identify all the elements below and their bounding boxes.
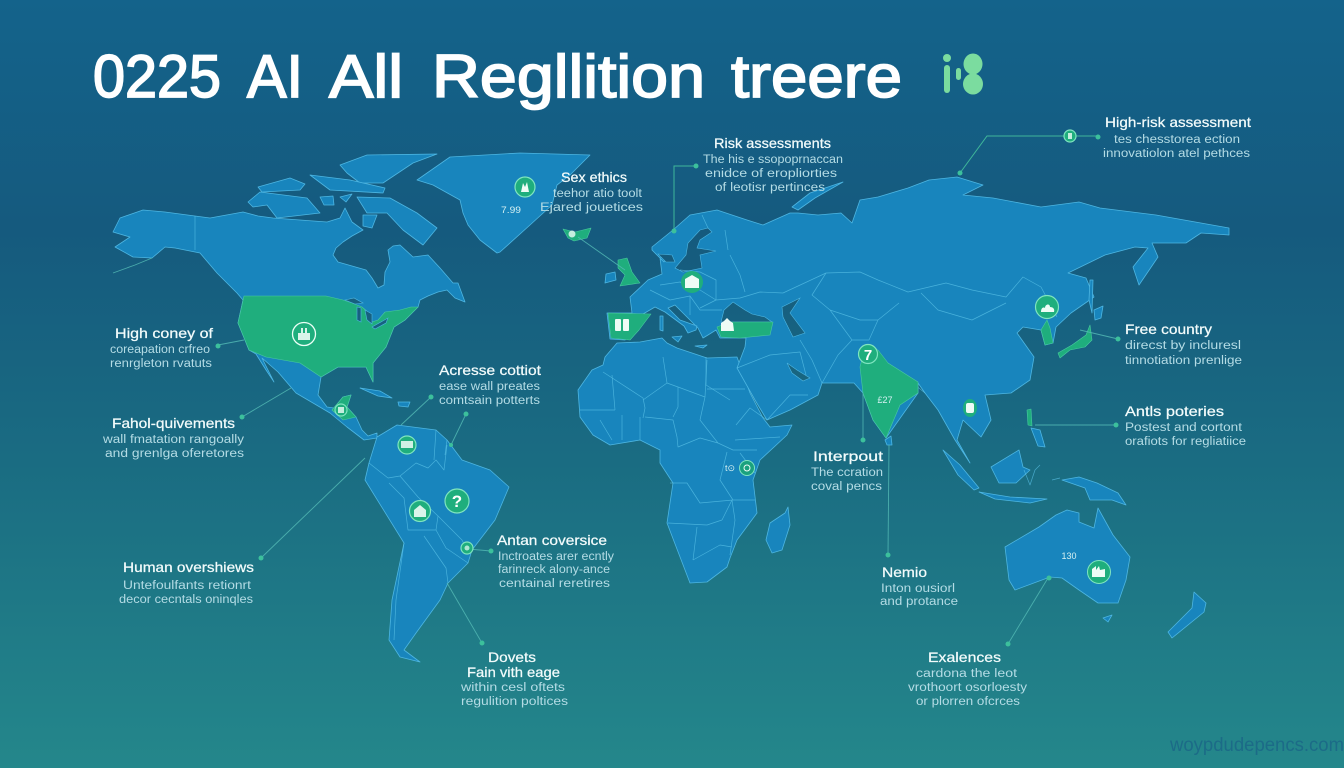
callout: acresse cottiot: comtsain potterts xyxy=(439,395,540,407)
label: Australia value: 130 xyxy=(1061,551,1077,561)
callout: exalences: or plorren ofcrces xyxy=(916,696,1020,708)
country highlight: India xyxy=(860,347,918,438)
country highlight: Central America xyxy=(332,395,356,420)
callout: antls poteries: Antls poteries xyxy=(1125,403,1224,419)
country highlight: Spain xyxy=(608,313,651,340)
callout: free country: tinnotiation prenlige xyxy=(1125,355,1242,367)
callout: human overshiews xyxy=(119,559,254,606)
continent: Greenland xyxy=(417,153,590,253)
title: AI xyxy=(247,43,303,110)
continent: Africa xyxy=(578,338,792,583)
connector: antls xyxy=(1035,422,1118,428)
callout: free country: direcst by incluresl xyxy=(1125,340,1241,352)
callout: dovets: Fain vith eage xyxy=(467,664,560,680)
icon: Brazil marker xyxy=(445,489,469,513)
callout: high coney: renrgleton rvatuts xyxy=(110,358,212,370)
icon: Iceland marker xyxy=(568,230,576,238)
connector: Iceland to Britain xyxy=(578,237,625,270)
title: All xyxy=(329,43,403,110)
icon: Venezuela marker xyxy=(398,436,416,454)
callout: nemio: Nemio xyxy=(882,564,927,580)
callout: interpout: The ccration xyxy=(811,467,883,479)
label: India value: £27 xyxy=(877,395,893,405)
callout: human overshiews: Human overshiews xyxy=(123,559,254,575)
callout: exalences: Exalences xyxy=(928,649,1001,665)
callout: antls poteries: orafiots for regliatiice xyxy=(1125,436,1246,448)
callout: free country: Free country xyxy=(1125,321,1212,337)
connector: nemio xyxy=(886,445,890,558)
callout: exalences xyxy=(908,649,1027,708)
callout: fahol-quivements: and grenlga oferetores xyxy=(105,448,244,460)
callout: nemio: Inton ousiorl xyxy=(881,583,955,595)
islands: Southeast Asia xyxy=(885,409,1126,505)
islands: Britain and Ireland xyxy=(605,258,640,286)
icon: Uruguay marker xyxy=(461,542,473,554)
title: Regllition xyxy=(432,43,705,110)
callout: risk assessments: enidce of eropliorties xyxy=(705,168,837,180)
callout: sex ethics: Sex ethics xyxy=(561,169,627,185)
callout: dovets: Dovets xyxy=(488,649,536,665)
icon: Bolivia marker xyxy=(410,500,430,522)
icon: Thailand marker xyxy=(963,399,977,417)
callout: dovets: within cesl oftets xyxy=(460,682,565,694)
callout: human overshiews: decor cecntals oninqles xyxy=(119,594,253,606)
callout: sex ethics xyxy=(501,169,643,215)
icon: Turkey marker xyxy=(721,318,734,331)
callout: fahol-quivements xyxy=(102,415,244,460)
callout: antls poteries xyxy=(1125,403,1246,448)
callout: free country xyxy=(1125,321,1242,367)
callout: acresse cottiot: ease wall preates xyxy=(439,381,540,393)
icon: India marker xyxy=(858,344,878,364)
title xyxy=(93,43,902,110)
callout: exalences: cardona the leot xyxy=(916,668,1018,680)
continent: North America xyxy=(113,154,465,440)
callout: high-risk assessment: tes chesstorea ection xyxy=(1114,134,1240,146)
callout: antan coversice: centainal reretires xyxy=(499,578,610,590)
continent: Eurasia xyxy=(607,177,1229,463)
connector: high coney xyxy=(216,340,244,348)
callout: dovets: regulition poltices xyxy=(461,696,568,708)
icon: Spain marker xyxy=(615,319,629,331)
callout: risk assessments: of leotisr pertinces xyxy=(715,182,825,194)
callout: antan coversice xyxy=(497,532,614,590)
callout: antan coversice: Antan coversice xyxy=(497,532,607,548)
islands: Japan and Sakhalin xyxy=(1058,280,1103,358)
callout: human overshiews: Untefoulfants retionrt xyxy=(123,580,252,592)
callout: risk assessments: Risk assessments xyxy=(714,135,831,151)
callout: antan coversice: Inctroates arer ecntly xyxy=(498,551,614,563)
connector: fahol xyxy=(240,388,291,420)
callout: high-risk assessment: High-risk assessment xyxy=(1105,114,1251,130)
callout: interpout: coval pencs xyxy=(811,481,882,493)
callout: sex ethics: 7.99 xyxy=(501,205,521,215)
great lakes xyxy=(345,298,388,329)
connector: risk assessments xyxy=(672,164,698,234)
callout: high coney: High coney of xyxy=(115,325,213,341)
icon: Kenya marker xyxy=(725,460,754,476)
icon: Greenland marker xyxy=(515,177,535,197)
callout: acresse cottiot xyxy=(439,362,541,407)
world map xyxy=(113,153,1229,662)
callout: high coney xyxy=(110,325,213,370)
continent: Australia xyxy=(1005,508,1130,603)
icon: India marker: 7 xyxy=(864,347,872,364)
callout: antan coversice: farinreck alony-ance xyxy=(498,564,610,576)
icon: Brazil marker: ? xyxy=(452,492,462,511)
callout: high-risk assessment: innovatiolon atel pethces xyxy=(1103,148,1250,160)
connector: acresse xyxy=(401,394,434,425)
callout: dovets xyxy=(460,649,568,708)
icon: United States marker xyxy=(292,322,316,346)
country highlight: Iceland xyxy=(563,228,591,241)
icon: Australia marker xyxy=(1088,560,1110,584)
icon: Central America marker xyxy=(335,404,347,416)
callout: high-risk assessment xyxy=(1103,114,1251,160)
callout: nemio: and protance xyxy=(880,596,958,608)
callout: fahol-quivements: wall fmatation rangoally xyxy=(102,434,244,446)
connector: human oversight xyxy=(258,458,365,560)
connector: interpout xyxy=(860,393,866,442)
islands: Tasmania and New Zealand xyxy=(1103,592,1206,638)
callout: nemio xyxy=(880,564,958,608)
callout: acresse cottiot: Acresse cottiot xyxy=(439,362,541,378)
logo icon xyxy=(943,54,983,94)
callout: risk assessments: The his e ssopoprnaccan xyxy=(703,154,843,166)
connector: north Brazil xyxy=(449,412,468,447)
connector: free country xyxy=(1080,330,1120,342)
callout: high coney: coreapation crfreo xyxy=(110,344,210,356)
callout: sex ethics: teehor atio toolt xyxy=(553,188,643,200)
icon: China marker xyxy=(1036,296,1058,318)
callout: interpout: Interpout xyxy=(813,448,883,464)
islands: Mediterranean xyxy=(660,316,707,348)
connector: dovets xyxy=(447,583,484,646)
callout: interpout xyxy=(811,448,883,493)
callout: antls poteries: Postest and cortont xyxy=(1125,422,1243,434)
title: treere xyxy=(731,43,902,110)
callout: exalences: vrothoort osorloesty xyxy=(908,682,1027,694)
callout: risk assessments xyxy=(703,135,843,194)
island: Madagascar xyxy=(766,507,790,553)
title: 0225 xyxy=(93,43,221,110)
country highlight: Korea xyxy=(1041,320,1053,345)
icon: Germany marker xyxy=(681,271,703,293)
country highlight: Turkey xyxy=(717,322,773,338)
country highlight: United States xyxy=(238,296,418,382)
icon: Kenya marker: t⊙ xyxy=(725,463,735,473)
callout: fahol-quivements: Fahol-quivements xyxy=(112,415,235,431)
callout: sex ethics: Ejared jouetices xyxy=(540,202,643,214)
continent: South America xyxy=(365,425,509,662)
watermark: woypdudepencs.com xyxy=(1169,735,1344,756)
connector: antan xyxy=(468,548,494,554)
connector: exalences xyxy=(1006,576,1052,646)
icon: high-risk marker xyxy=(1064,130,1076,142)
connector: high-risk assessment xyxy=(958,134,1100,176)
